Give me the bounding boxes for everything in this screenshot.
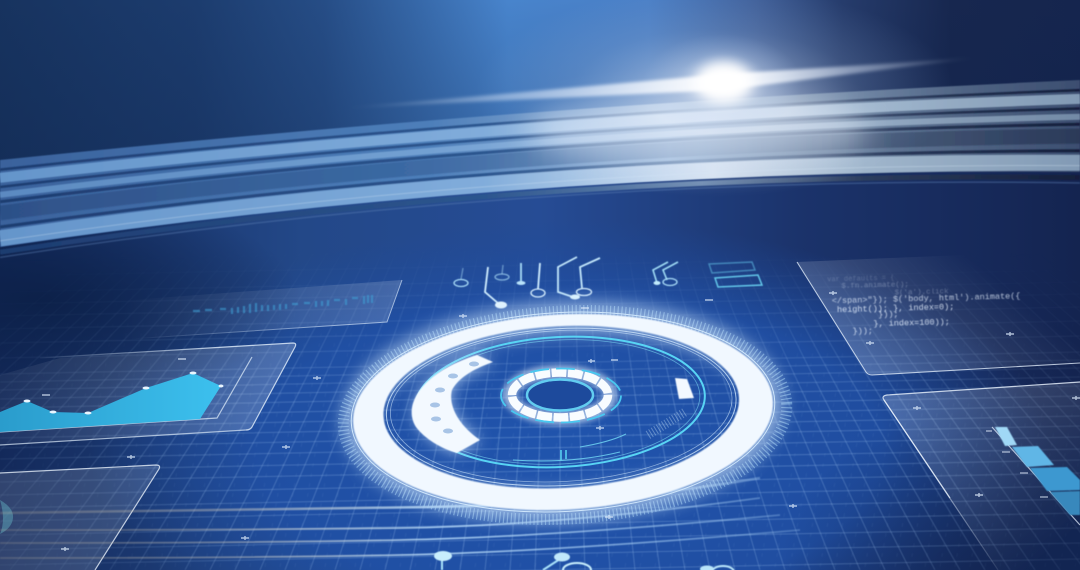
white C segment (412, 355, 493, 453)
central HUD dial (338, 300, 792, 530)
floor grid (0, 282, 1080, 570)
code text: </span>"}); $('body, html').animate({ (832, 291, 1021, 306)
glow behind C segment (416, 355, 493, 452)
teal circle fragment (0, 500, 13, 534)
icon: outlined rectangles (709, 262, 762, 287)
bottom tick marks (561, 450, 566, 460)
code text: }, index=100)); (873, 317, 950, 329)
hub inner ring (527, 380, 593, 410)
hub outer cyan dashes (501, 368, 621, 422)
lens flare (345, 0, 975, 197)
bottom circuit nodes (434, 551, 734, 570)
panel: code (797, 250, 1080, 375)
code text (827, 271, 1021, 337)
code text: var defaults = { (827, 275, 895, 284)
background: perspective floor (0, 130, 1080, 570)
light band: curved streaks (0, 80, 1080, 257)
inner thin arcs (513, 434, 626, 461)
hatch segment (648, 412, 685, 435)
dial glow (353, 307, 773, 517)
bars (995, 427, 1080, 515)
code text: })); (878, 309, 899, 320)
floor streak lines (0, 478, 800, 558)
plus markers (42, 291, 1080, 551)
code text: })); (852, 326, 873, 337)
code text: height()); }, index=0); (837, 302, 954, 315)
panel: bar chart (883, 382, 1080, 570)
area chart series (0, 372, 224, 432)
cyan inner ring (412, 330, 708, 474)
code text: $('a').click (894, 288, 949, 298)
hub glow (510, 372, 610, 418)
code text: $.fn.animate(); (841, 281, 909, 291)
panel: area chart (0, 343, 296, 445)
outer white ring (346, 302, 780, 522)
panel: lower left (0, 465, 160, 570)
chart axis (986, 427, 1080, 525)
background: sky gradient (0, 0, 1080, 260)
chart axes (0, 357, 252, 432)
panel: faint waveform (110, 280, 402, 340)
white block marker (675, 378, 694, 399)
hub segmented ring (512, 372, 608, 418)
dial tick ring (338, 300, 792, 530)
circuit traces (454, 257, 678, 308)
